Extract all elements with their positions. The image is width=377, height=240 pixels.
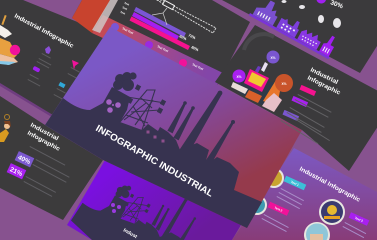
title: INFOGRAPHIC INDUSTRIAL bbox=[94, 123, 215, 200]
photo: machine four bbox=[304, 222, 330, 240]
icon: pink funnel bbox=[72, 60, 79, 70]
factory three bbox=[297, 27, 323, 50]
red block bbox=[72, 0, 110, 33]
labels: Text bbox=[122, 5, 128, 11]
gradient band bbox=[92, 15, 223, 90]
panel: top left slide bbox=[0, 0, 115, 122]
factory windows bbox=[146, 130, 164, 142]
lattice strip bbox=[92, 0, 118, 33]
step labels bbox=[122, 26, 204, 71]
panel: main title slide bbox=[45, 27, 302, 228]
photo: machine three bbox=[319, 199, 345, 225]
icon: step two bbox=[145, 41, 153, 49]
tower and pylon bbox=[113, 72, 235, 130]
heading: Industrial Infographic bbox=[13, 13, 75, 50]
icon: step one bbox=[111, 23, 119, 31]
icon: purple pair bbox=[32, 66, 40, 73]
tag: pink bbox=[268, 202, 289, 216]
bar: blue bbox=[134, 7, 186, 37]
panel: left slide with percentages bbox=[0, 96, 103, 220]
factories row bbox=[249, 0, 340, 59]
icon: purple gem bbox=[45, 46, 51, 54]
photo: machine one bbox=[264, 168, 284, 188]
lattice pylon header bbox=[152, 0, 216, 33]
icon: gold badge bbox=[4, 114, 10, 120]
panel: bottom right slide bbox=[232, 148, 377, 240]
percent values bbox=[179, 33, 200, 53]
stat bubble: top: X% bbox=[271, 56, 276, 60]
heading: Infographic bbox=[306, 75, 342, 97]
stat bubble: orange: X% bbox=[282, 82, 287, 86]
heading bbox=[26, 122, 61, 153]
tag: purple bbox=[349, 212, 369, 226]
tag: pink: Text 2 bbox=[274, 206, 283, 213]
panel: lower title slide bbox=[67, 150, 262, 240]
heading: Infographic bbox=[26, 130, 61, 153]
labels bbox=[120, 1, 130, 16]
ground line bbox=[249, 13, 330, 59]
factory four bbox=[319, 34, 338, 57]
factory illustration bbox=[231, 62, 282, 112]
icon: pink badge bbox=[10, 45, 20, 55]
labels: Text bbox=[124, 1, 130, 7]
step labels: Text Text bbox=[157, 44, 169, 53]
heading: Industrial bbox=[309, 67, 339, 86]
tag: purple: Text 3 bbox=[354, 216, 364, 223]
step labels: Text Text bbox=[122, 26, 134, 35]
stat bubble: left: X% bbox=[237, 75, 242, 79]
silhouette bbox=[71, 195, 195, 240]
decorative arc bbox=[244, 34, 274, 50]
tag: blue bbox=[282, 110, 299, 121]
percent values: 60% bbox=[179, 34, 188, 42]
percent values: 80% bbox=[191, 45, 200, 53]
labels: Text bbox=[120, 10, 126, 16]
icon: blue bars bbox=[58, 82, 66, 88]
photo: machine two bbox=[247, 195, 267, 215]
tag: pink bbox=[299, 85, 316, 96]
illustration: worker bbox=[0, 121, 11, 142]
tower and pylon bbox=[116, 186, 196, 224]
bar: pink bbox=[130, 16, 190, 50]
icon: step three bbox=[179, 59, 187, 67]
illustration: isometric stack bbox=[0, 15, 18, 65]
lower title: Indust bbox=[122, 228, 138, 240]
stat bubble: orange bbox=[275, 74, 293, 92]
bar: purple bbox=[132, 12, 179, 40]
percent values: 72% bbox=[188, 33, 197, 41]
factory two bbox=[276, 14, 302, 38]
stat: 21 percent: 21% bbox=[9, 166, 24, 178]
text rows bbox=[24, 146, 70, 197]
heading bbox=[306, 67, 342, 97]
text rows bbox=[28, 53, 80, 101]
tag: purple bbox=[291, 96, 308, 107]
stat bubble: left bbox=[232, 70, 246, 82]
icon: radiation bbox=[106, 99, 121, 113]
tag: cyan bbox=[284, 176, 306, 190]
heading: Industrial Infographic bbox=[298, 166, 362, 204]
factory one bbox=[253, 0, 283, 26]
silhouette bbox=[45, 87, 262, 228]
panel: top center bar slide bbox=[72, 0, 250, 90]
stat bubble: top bbox=[266, 50, 280, 64]
radiation mark bbox=[111, 203, 121, 213]
panel: right industrial illustration slide bbox=[215, 25, 377, 171]
text rows bbox=[280, 94, 332, 144]
tag: cyan: Text 1 bbox=[290, 180, 300, 187]
stat: 30 percent bbox=[316, 0, 344, 10]
step labels: Text Text bbox=[192, 62, 204, 71]
smoke bbox=[282, 0, 341, 28]
panel: top right factories slide bbox=[222, 0, 377, 73]
heading: Industrial bbox=[29, 122, 60, 142]
stat: 40 percent: 40% bbox=[17, 154, 32, 166]
text rows bbox=[262, 188, 366, 238]
